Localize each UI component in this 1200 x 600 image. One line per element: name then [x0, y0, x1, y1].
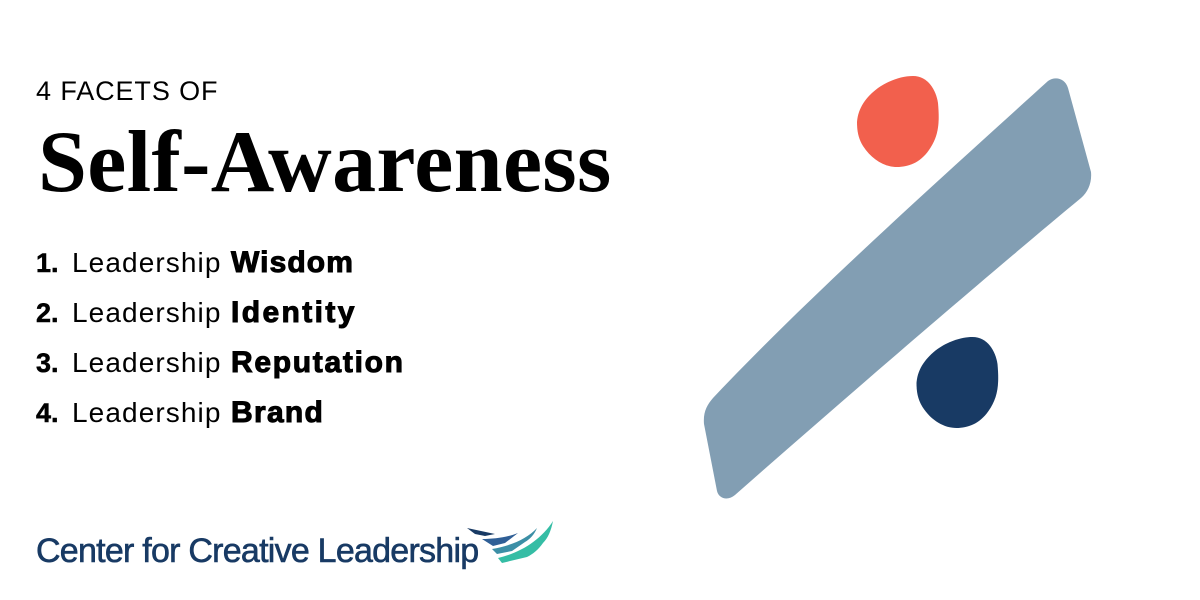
- list item 1: Wisdom: [231, 246, 354, 279]
- list item 4: Brand: [231, 396, 324, 429]
- list item 2: [36, 296, 357, 329]
- list item 1: Leadership: [72, 247, 222, 278]
- list item 1: [36, 246, 354, 279]
- illustration: slash and two blobs: [704, 76, 1092, 498]
- icon: logo swoosh: [467, 521, 553, 563]
- list of facets: [36, 246, 405, 429]
- list item 4: Leadership: [72, 397, 222, 428]
- list item 2: Identity: [231, 296, 357, 329]
- shape: blue-grey slash: [704, 78, 1091, 498]
- list item 3: Reputation: [231, 346, 405, 379]
- list item 3: [36, 346, 405, 379]
- list item 1: 1.: [36, 248, 59, 278]
- logo wordmark: Center for Creative Leadership: [36, 532, 478, 570]
- shape: coral blob: [857, 76, 939, 167]
- list item 2: Leadership: [72, 297, 222, 328]
- list item 4: [36, 396, 324, 429]
- list item 3: 3.: [36, 348, 59, 378]
- list item 3: Leadership: [72, 347, 222, 378]
- title: Self-Awareness: [38, 114, 612, 211]
- list item 2: 2.: [36, 298, 59, 328]
- list item 4: 4.: [36, 398, 59, 428]
- eyebrow heading: 4 FACETS OF: [36, 76, 218, 106]
- shape: navy blob: [916, 337, 998, 428]
